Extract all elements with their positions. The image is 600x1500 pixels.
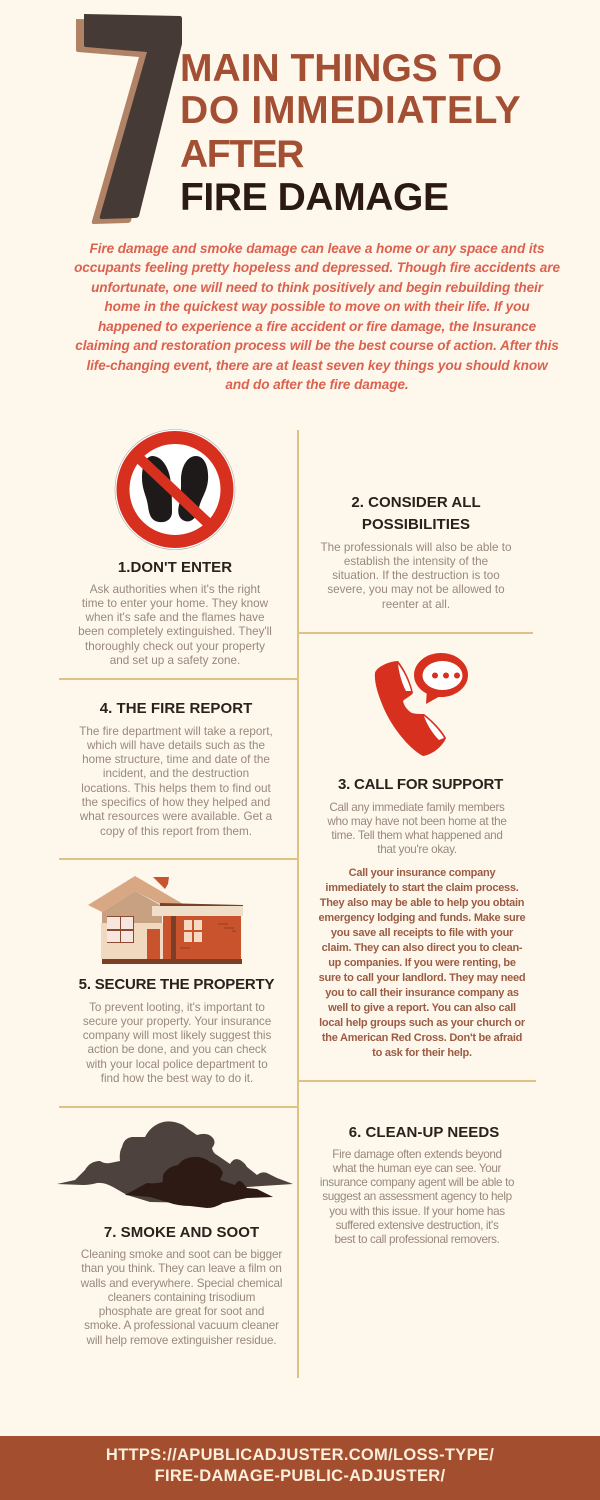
text: 7 smoke and soot: than you think. They can leave a film on: [81, 1262, 282, 1275]
heading: 1 don't enter: 1.DON'T ENTER: [118, 559, 232, 576]
text: call your insurance company: Call your insurance company: [349, 867, 495, 879]
text: 6 clean-up needs: insurance company agent will be able to: [320, 1176, 514, 1189]
intro text: and do after the fire damage.: [225, 377, 409, 392]
text: 6 clean-up needs: suffered extensive destruction, it's: [336, 1219, 498, 1232]
text: 4 the fire report: The fire department will take a report,: [79, 724, 273, 738]
heading: 2 consider all possibilities: [351, 494, 481, 533]
text: 2 consider all possibilities: [320, 540, 512, 611]
text: 1 don't enter: and set up a safety zone.: [110, 654, 240, 667]
heading: 2 consider all possibilities: 2. CONSIDER ALL: [351, 494, 481, 511]
text: 5 secure the property: secure your property. Your insurance: [83, 1015, 271, 1028]
heading: 4 the fire report: 4. THE FIRE REPORT: [100, 700, 252, 717]
text: 3 call for support: that you're okay.: [377, 843, 457, 856]
footer url: [106, 1446, 494, 1485]
text: 3 call for support: time. Tell them what happened and: [331, 829, 503, 842]
heading: 7 smoke and soot: 7. SMOKE AND SOOT: [104, 1224, 259, 1241]
text: 5 secure the property: company will most likely suggest this: [83, 1029, 271, 1042]
text: 1 don't enter: [78, 582, 272, 667]
text: call your insurance company: immediately to start the claim process.: [325, 882, 519, 894]
text: 4 the fire report: locations. This helps them to find out: [81, 782, 271, 795]
text: 1 don't enter: time to enter your home. They know: [82, 597, 268, 610]
text: 7 smoke and soot: Cleaning smoke and soot can be bigger: [81, 1248, 282, 1261]
text: 7 smoke and soot: will help remove extinguisher residue.: [87, 1334, 276, 1347]
text: 7 smoke and soot: [80, 1248, 282, 1347]
text: call your insurance company: [318, 867, 526, 1059]
text: 5 secure the property: action be done, and you can check: [88, 1043, 266, 1056]
intro text: happened to experience a fire accident or fire damage, the Insurance: [98, 319, 536, 334]
title: MAIN THINGS TO: [180, 47, 502, 90]
text: call your insurance company: the American Red Cross. Don't be afraid: [322, 1032, 522, 1044]
text: call your insurance company: well to give a report. You can also call: [328, 1002, 516, 1014]
text: call your insurance company: you save all receipts to file with your: [331, 927, 513, 939]
text: 2 consider all possibilities: establish the intensity of the: [344, 555, 488, 568]
intro text: Fire damage and smoke damage can leave a home or any space and its: [90, 241, 544, 256]
text: 4 the fire report: [79, 724, 273, 838]
text: 2 consider all possibilities: situation. If the destruction is too: [332, 569, 500, 582]
text: 4 the fire report: the specifics of how they helped and: [82, 796, 270, 809]
text: 6 clean-up needs: Fire damage often extends beyond: [332, 1148, 502, 1160]
text: 2 consider all possibilities: severe, you may not be allowed to: [327, 583, 505, 596]
text: 4 the fire report: what resources were available. Get a: [80, 810, 272, 823]
text: 5 secure the property: To prevent looting, it's important to: [89, 1000, 265, 1014]
text: 7 smoke and soot: phosphate are great for soot and: [99, 1305, 264, 1318]
heading: 3 call for support: 3. CALL FOR SUPPORT: [338, 776, 503, 793]
text: 5 secure the property: with your local police department to: [86, 1058, 268, 1071]
text: call your insurance company: you to call their insurance company as: [325, 987, 519, 999]
text: call your insurance company: to ask for their help.: [372, 1047, 472, 1059]
text: 4 the fire report: incident, and the destruction: [103, 767, 249, 780]
text: 6 clean-up needs: you with this issue. If your home has: [329, 1205, 505, 1218]
text: call your insurance company: up companies. If you were renting, be: [328, 957, 516, 969]
intro text: home in the quickest way possible to move on with their life. If you: [104, 299, 530, 314]
heading: 5 secure the property: 5. SECURE THE PROPERTY: [79, 976, 274, 993]
text: 2 consider all possibilities: The professionals will also be able to: [320, 540, 512, 554]
icon: phone with speech bubble: [374, 653, 468, 756]
heading: 6 clean-up needs: 6. CLEAN-UP NEEDS: [349, 1124, 499, 1141]
text: 1 don't enter: been completely extinguished. They'll: [78, 625, 272, 638]
text: 1 don't enter: Ask authorities when it's the right: [90, 582, 260, 596]
icon: no entry footprints: [114, 429, 236, 550]
intro text: occupants feeling pretty hopeless and depressed. Though fire accidents are: [74, 260, 560, 275]
text: 5 secure the property: [83, 1000, 271, 1085]
text: 1 don't enter: thoroughly check out your property: [85, 640, 265, 653]
text: call your insurance company: They also may be able to help you obtain: [320, 897, 524, 909]
text: call your insurance company: claim. They can also direct you to clean-: [322, 942, 522, 954]
text: 1 don't enter: when it's safe and the flames have: [86, 611, 264, 624]
text: 7 smoke and soot: walls and everywhere. Special chemical: [81, 1277, 282, 1290]
text: 6 clean-up needs: best to call professional removers.: [334, 1233, 500, 1246]
text: 6 clean-up needs: [320, 1148, 514, 1246]
text: 7 smoke and soot: cleaners containing trisodium: [108, 1291, 255, 1304]
title: AFTER: [180, 133, 303, 176]
text: 3 call for support: [327, 800, 507, 856]
text: 4 the fire report: home structure, time and date of the: [82, 753, 270, 766]
text: 5 secure the property: find how the best way to do it.: [101, 1072, 253, 1085]
text: 7 smoke and soot: smoke. A professional vacuum cleaner: [84, 1319, 279, 1332]
icon: large numeral 7: [76, 14, 182, 224]
text: 4 the fire report: copy of this report from them.: [100, 825, 252, 838]
intro text: life-changing event, there are at least seven key things you should know: [86, 358, 548, 373]
icon: smoke cloud: [57, 1121, 293, 1208]
icon: house: [88, 876, 243, 964]
text: 6 clean-up needs: what the human eye can see. Your: [333, 1162, 501, 1175]
footer url: HTTPS://APUBLICADJUSTER.COM/LOSS-TYPE/: [106, 1446, 494, 1464]
footer band: [0, 1436, 600, 1500]
heading: 2 consider all possibilities: POSSIBILITIES: [362, 516, 470, 533]
title: FIRE DAMAGE: [180, 176, 449, 219]
intro text: claiming and restoration process will be the best course of action. After this: [75, 338, 559, 353]
text: 6 clean-up needs: suggest an assessment agency to help: [322, 1190, 512, 1203]
text: 3 call for support: Call any immediate family members: [329, 800, 505, 814]
title: [180, 47, 521, 219]
text: call your insurance company: emergency lodging and funds. Make sure: [319, 912, 525, 924]
text: 4 the fire report: which will have details such as the: [87, 739, 265, 752]
title: DO IMMEDIATELY: [180, 89, 521, 132]
text: 3 call for support: who may have not been home at the: [327, 815, 507, 828]
intro text: [74, 241, 560, 392]
text: call your insurance company: local help groups such as your church or: [319, 1017, 525, 1029]
intro text: unfortunate, one will need to think positively and begin rebuilding their: [91, 280, 543, 295]
text: 2 consider all possibilities: reenter at all.: [382, 598, 450, 611]
text: call your insurance company: sure to call your landlord. They may need: [319, 972, 525, 984]
footer url: FIRE-DAMAGE-PUBLIC-ADJUSTER/: [155, 1467, 445, 1485]
